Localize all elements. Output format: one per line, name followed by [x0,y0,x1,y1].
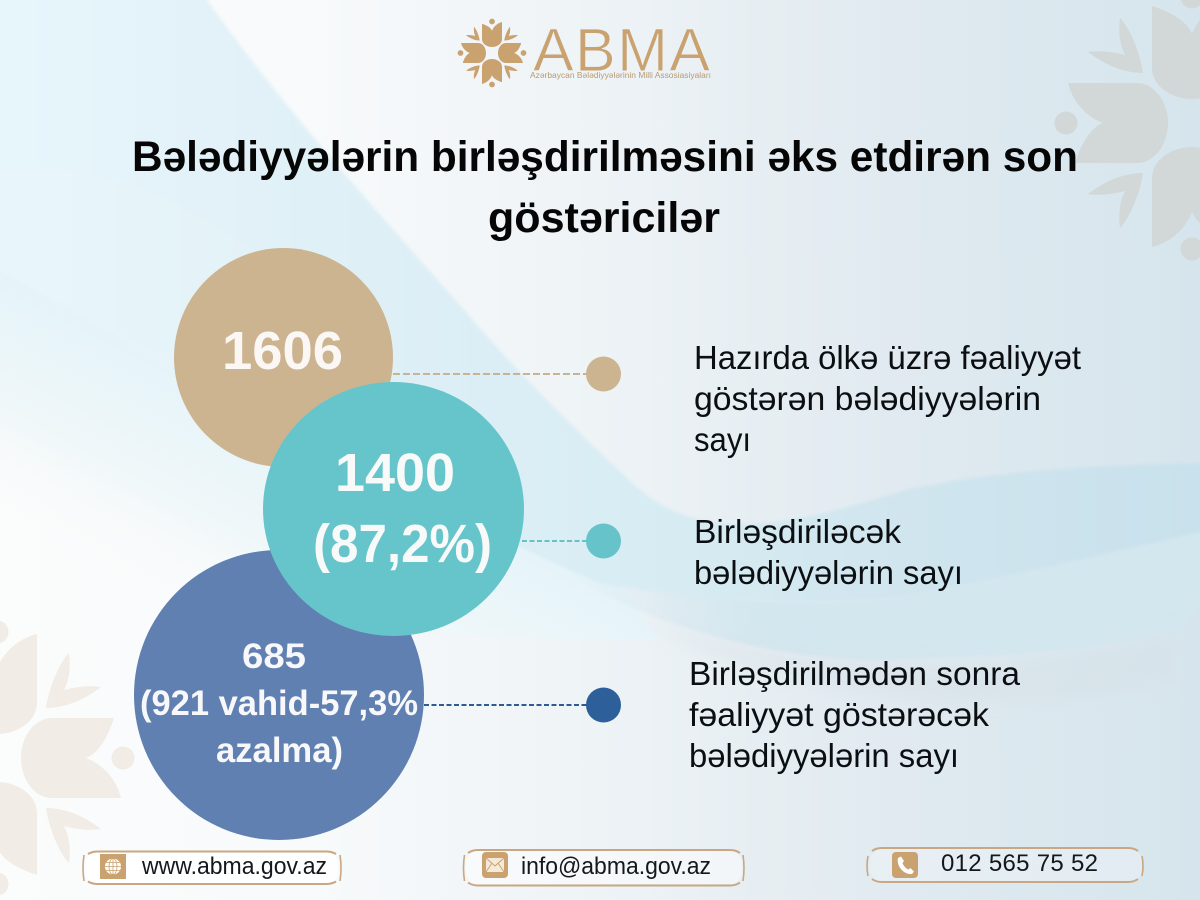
text: merged municipalities: bələdiyyələrin sayı [694,554,963,591]
circle: 685: (921 vahid-57,3% [140,684,418,723]
logo mark [458,19,526,87]
text: after merge [689,655,1021,774]
logo subtitle: Azərbaycan Bələdiyyələrinin Milli Assosiasiyaları [530,71,711,80]
marker: tan dot [586,356,621,392]
contact: website [83,852,341,884]
text: merged municipalities: Birləşdiriləcək [694,513,902,550]
text: after merge: bələdiyyələrin sayı [689,737,959,774]
circle: 685 [134,550,424,840]
circle: 685: 685 [242,637,306,676]
circle: 1606 [174,248,393,467]
text: after merge: Birləşdirilmədən sonra [689,655,1021,692]
circle: 1400 [263,382,524,636]
text: merged municipalities [694,513,963,591]
text: after merge: fəaliyyət göstərəcək [689,696,990,733]
connector: 1400 [522,540,590,542]
decorative flower: top right [1054,0,1200,260]
marker: teal dot [586,524,621,558]
title: Bələdiyyələrin birləşdirilməsini əks etdirən son [132,133,1078,181]
circle: 1400: (87,2%) [313,514,492,574]
logo wordmark: ABMA [533,16,710,84]
marker: blue dot [586,688,621,722]
circle: 1606: 1606 [222,321,343,381]
contact: email [464,850,744,886]
text: current municipalities: göstərən bələdiyyələrin [694,380,1041,417]
circle: 1400: 1400 [335,443,455,503]
title [132,133,1078,242]
contact: email: info@abma.gov.az [521,853,711,880]
text: current municipalities: sayı [694,421,751,458]
icon: globe [100,854,126,879]
text: current municipalities: Hazırda ölkə üzrə fəaliyyət [694,339,1081,376]
contact: phone [867,848,1143,882]
decorative flower: bottom left [0,620,134,896]
circle: 685: azalma) [216,731,343,770]
logo [458,16,711,87]
connector: 685 [424,704,590,706]
text: current municipalities [694,339,1081,458]
title: göstəricilər [488,194,720,242]
icon: phone [892,852,918,878]
connector: 1606 [393,373,590,375]
contact: phone: 012 565 75 52 [941,850,1098,877]
contact: website: www.abma.gov.az [141,853,327,880]
icon: envelope [482,852,508,878]
